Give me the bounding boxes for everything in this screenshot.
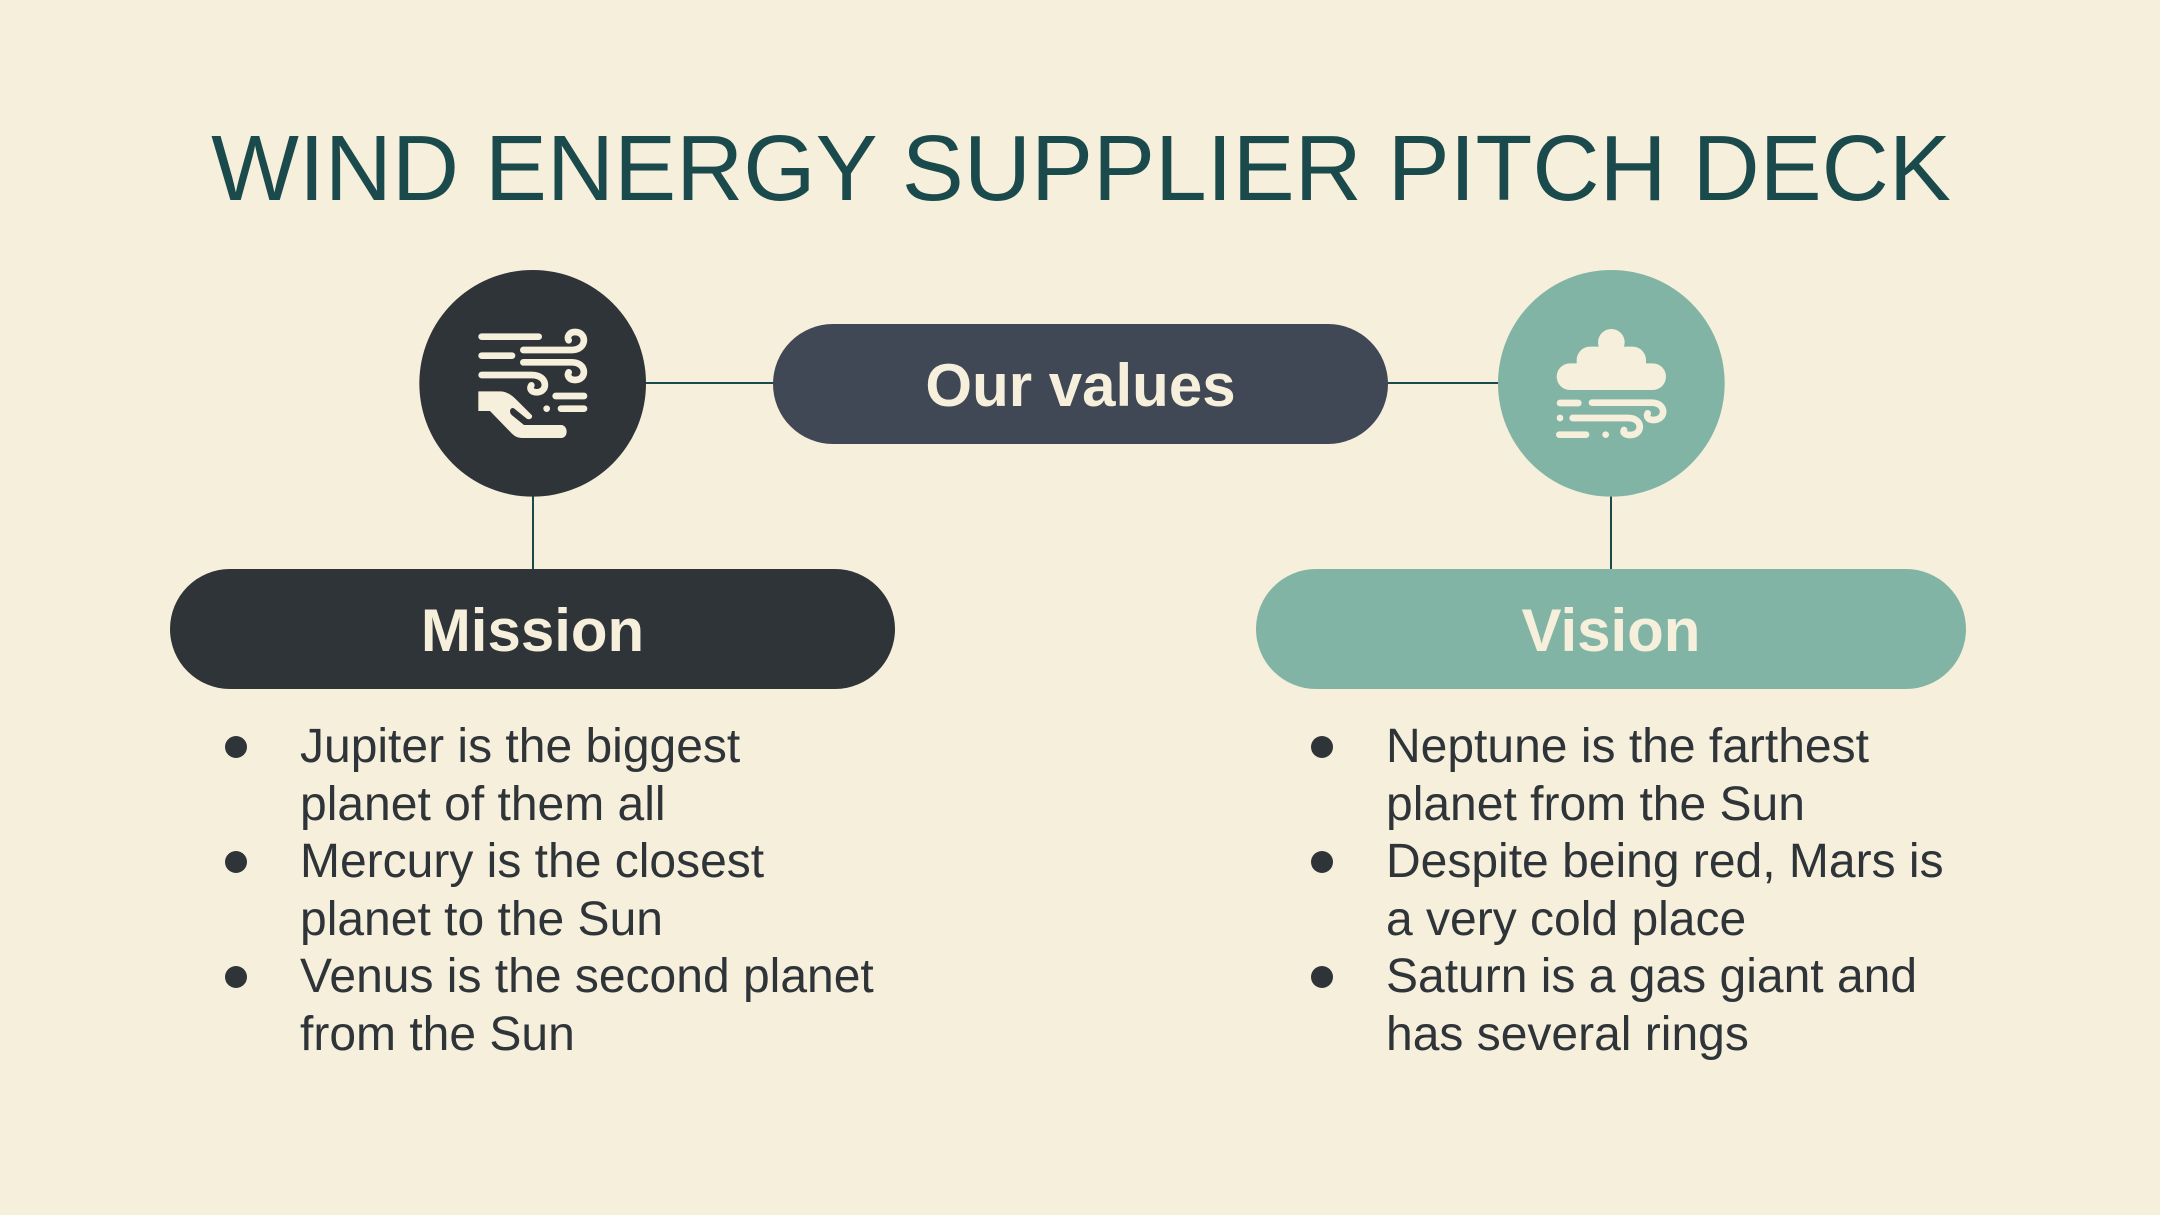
bullets: mission: planet to the Sun <box>300 893 663 946</box>
bullets: mission: Mercury is the closest <box>300 835 764 888</box>
pill: mission: Mission <box>421 597 644 664</box>
circle icon: vision cloud and wind <box>1498 270 1725 497</box>
title: WIND ENERGY SUPPLIER PITCH DECK <box>211 116 1951 220</box>
pill: vision <box>1256 569 1966 689</box>
bullets: mission: from the Sun <box>300 1008 575 1061</box>
bullets: vision: Despite being red, Mars is <box>1386 835 1944 888</box>
bullets: mission <box>225 720 874 1061</box>
bullets: vision: Neptune is the farthest <box>1386 720 1869 773</box>
circle icon: mission wind and hand <box>419 270 646 497</box>
bullets: mission: Venus is the second planet <box>300 950 874 1003</box>
bullets: vision: planet from the Sun <box>1386 778 1805 831</box>
pill: vision: Vision <box>1522 597 1700 664</box>
bullets: mission: Jupiter is the biggest <box>300 720 740 773</box>
bullets: vision: a very cold place <box>1386 893 1746 946</box>
bullets: vision: Saturn is a gas giant and <box>1386 950 1917 1003</box>
pill: our values: Our values <box>925 352 1236 419</box>
bullets: vision: has several rings <box>1386 1008 1749 1061</box>
pill: mission <box>170 569 895 689</box>
pill: our values <box>773 324 1388 444</box>
bullets: vision <box>1311 720 1944 1061</box>
bullets: mission: planet of them all <box>300 778 666 831</box>
